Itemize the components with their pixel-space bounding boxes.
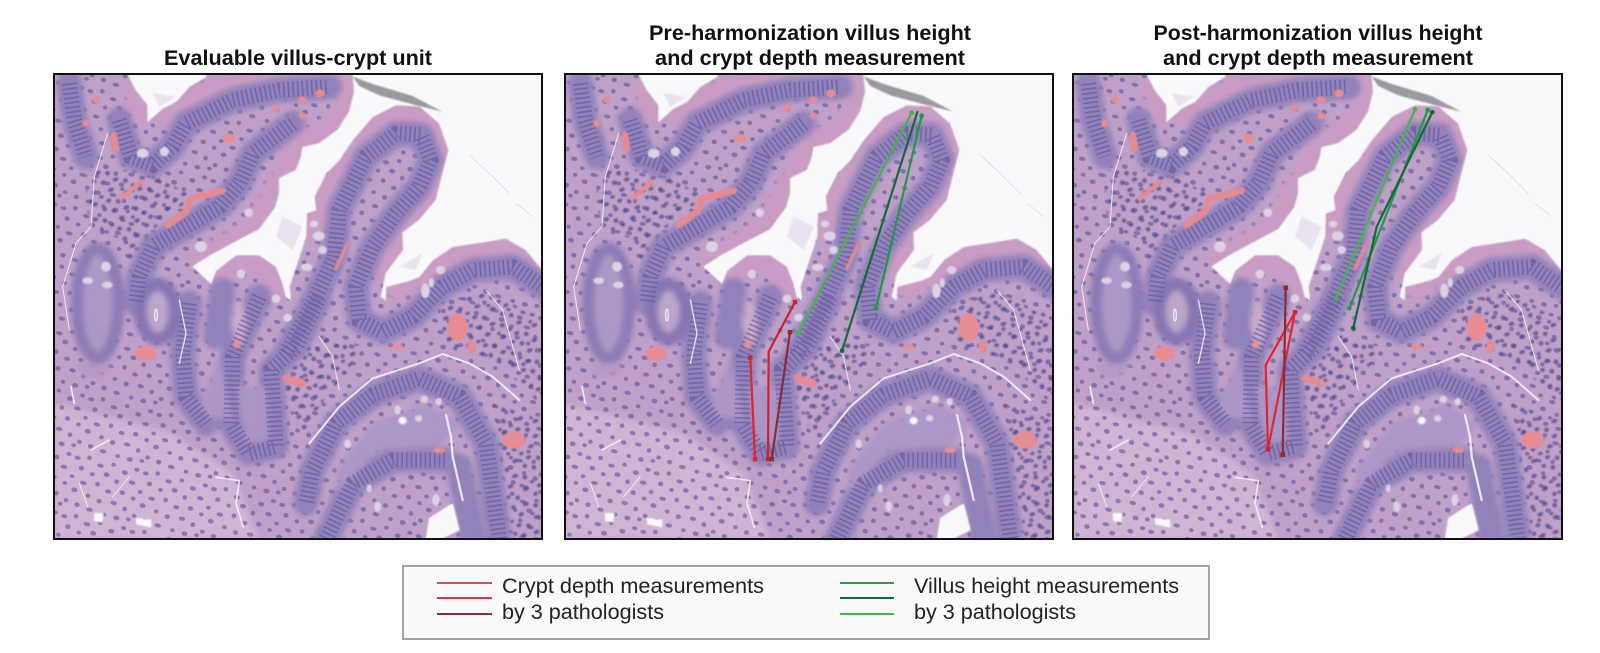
legend: villus height label: Villus height measurements [914,575,1179,598]
title: evaluable villus-crypt unit: Evaluable villus-crypt unit [164,47,432,70]
crypt depth lines by 3 pathologists [1266,286,1297,457]
legend: villus height line swatches [840,583,894,614]
legend: crypt depth label: Crypt depth measurements [502,575,764,598]
legend: crypt depth label: by 3 pathologists [502,601,664,624]
title: post-harmonization: and crypt depth measurement [1163,47,1473,70]
crypt depth lines by 3 pathologists [748,300,797,461]
panel: post-harmonization measurements [1073,74,1562,539]
villus height lines by 3 pathologists [1333,107,1435,330]
panel: pre-harmonization measurements [565,74,1054,539]
title: pre-harmonization: Pre-harmonization villus height [649,22,971,45]
legend [403,566,1209,639]
panel: evaluable villus-crypt unit histology image [54,74,543,539]
villus height lines by 3 pathologists [796,110,924,353]
title: post-harmonization: Post-harmonization villus height [1154,22,1482,45]
legend: crypt depth line swatches [437,583,492,614]
legend: villus height label: by 3 pathologists [914,601,1076,624]
title: pre-harmonization: and crypt depth measurement [655,47,965,70]
